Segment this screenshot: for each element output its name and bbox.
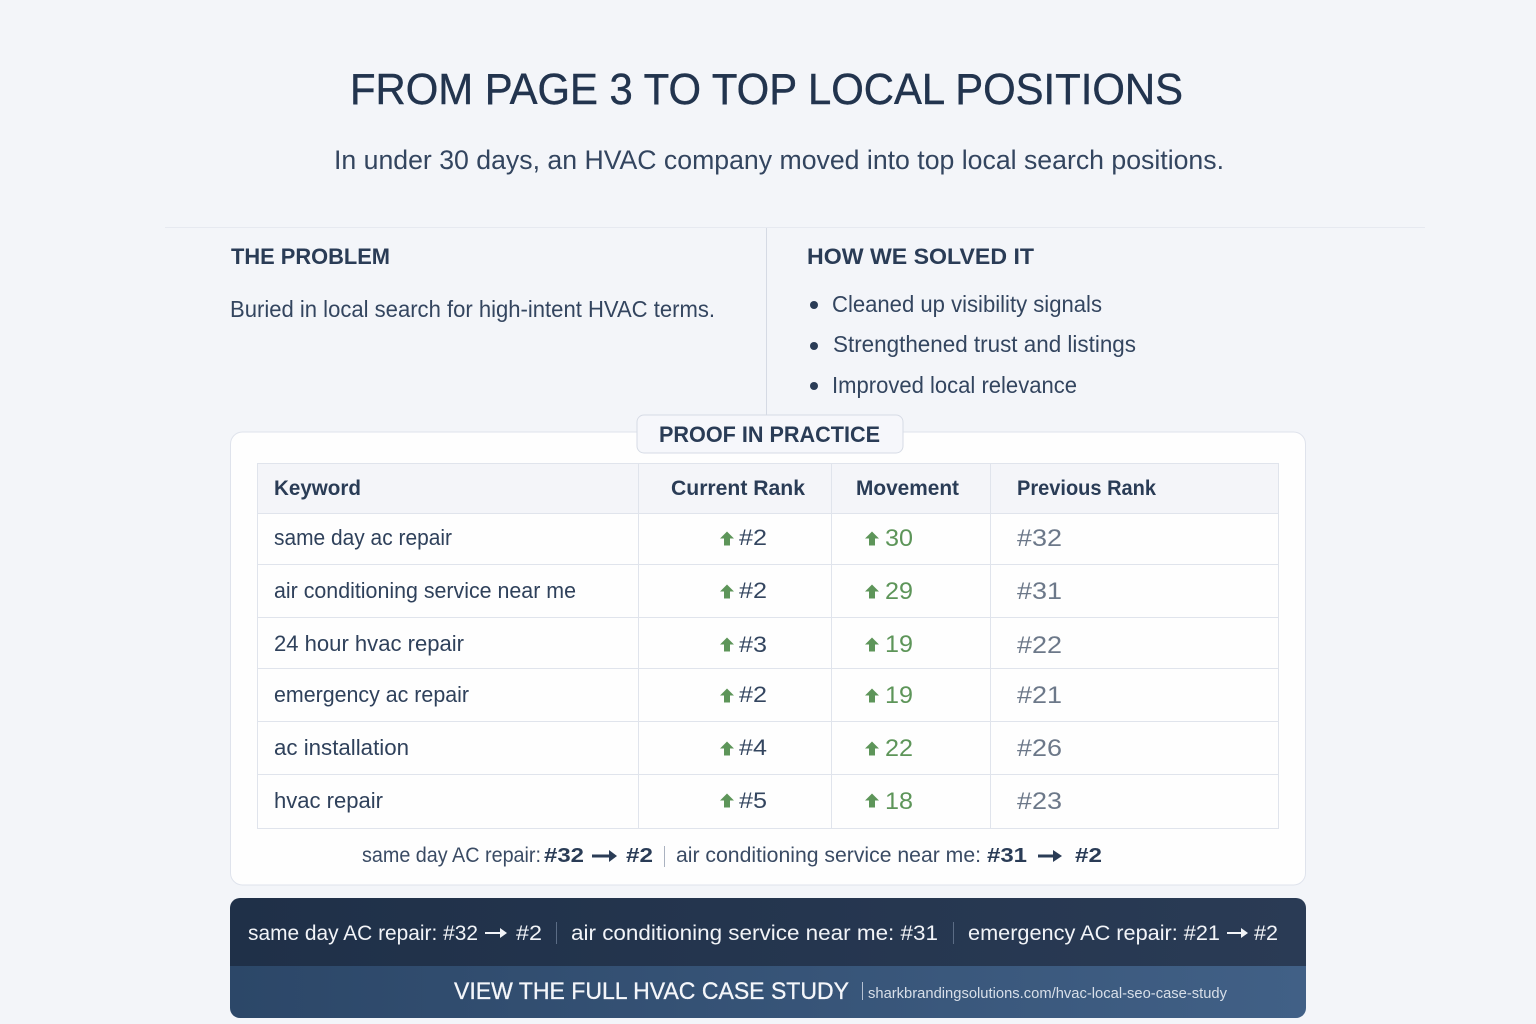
summary line: same day AC repair: xyxy=(362,843,541,867)
heading: the problem: THE PROBLEM xyxy=(231,244,390,269)
row: ac installation: 22 xyxy=(885,735,913,762)
results table xyxy=(257,463,1279,828)
row: hvac repair: 18 xyxy=(885,788,913,815)
row: same day ac repair: #32 xyxy=(1017,525,1062,552)
row: air conditioning service near me: air conditioning service near me xyxy=(274,578,576,603)
results strip xyxy=(230,898,1306,966)
footer band xyxy=(230,898,1306,1018)
panel: the problem xyxy=(230,244,715,322)
call to action: sharkbrandingsolutions.com/hvac-local-seo-case-study xyxy=(868,985,1227,1002)
row: emergency ac repair: emergency ac repair xyxy=(274,682,469,707)
row: hvac repair: #23 xyxy=(1017,788,1062,815)
badge: proof in practice: PROOF IN PRACTICE xyxy=(659,422,880,447)
results strip: emergency AC repair: #21 xyxy=(968,921,1220,945)
call to action: VIEW THE FULL HVAC CASE STUDY xyxy=(454,978,849,1005)
table header: Previous Rank xyxy=(1017,476,1156,500)
summary line: #2 xyxy=(1075,845,1102,867)
row: emergency ac repair xyxy=(274,682,1062,709)
solution list xyxy=(810,291,1136,398)
problem description: Buried in local search for high-intent HVAC terms. xyxy=(230,296,715,322)
results strip: #2 xyxy=(516,921,542,945)
call to action xyxy=(230,966,1306,1018)
row: ac installation: #4 xyxy=(739,735,767,760)
solution list: Strengthened trust and listings xyxy=(833,331,1136,357)
summary line: air conditioning service near me: xyxy=(676,843,981,867)
solution list: Cleaned up visibility signals xyxy=(832,291,1102,317)
results strip: same day AC repair: #32 xyxy=(248,921,478,945)
row: same day ac repair: #2 xyxy=(739,525,767,550)
row: 24 hour hvac repair: #3 xyxy=(739,632,767,657)
row: hvac repair xyxy=(274,788,1062,815)
table header: Keyword xyxy=(274,476,361,500)
row: same day ac repair xyxy=(274,525,1062,552)
row: 24 hour hvac repair: 19 xyxy=(885,631,913,658)
row: 24 hour hvac repair: #22 xyxy=(1017,632,1062,659)
row: emergency ac repair: #2 xyxy=(739,682,767,707)
panel: proof in practice xyxy=(230,415,1306,885)
heading: how we solved it: HOW WE SOLVED IT xyxy=(807,244,1035,269)
row: ac installation xyxy=(274,735,1062,762)
row: 24 hour hvac repair xyxy=(274,631,1062,659)
row: emergency ac repair: #21 xyxy=(1017,682,1062,709)
row: air conditioning service near me xyxy=(274,578,1062,605)
title: FROM PAGE 3 TO TOP LOCAL POSITIONS xyxy=(350,65,1183,114)
results strip: #2 xyxy=(1254,921,1278,945)
row: ac installation: #26 xyxy=(1017,735,1062,762)
row: same day ac repair: 30 xyxy=(885,525,913,552)
row: 24 hour hvac repair: 24 hour hvac repair xyxy=(274,631,464,656)
subtitle: In under 30 days, an HVAC company moved into top local search positions. xyxy=(334,145,1224,175)
table header: Movement xyxy=(856,476,959,500)
results strip: air conditioning service near me: #31 xyxy=(571,921,938,945)
badge: proof in practice xyxy=(637,415,903,453)
summary line: #32 xyxy=(544,845,584,867)
panel: how we solved it xyxy=(807,244,1136,398)
row: air conditioning service near me: 29 xyxy=(885,578,913,605)
row: air conditioning service near me: #2 xyxy=(739,578,767,603)
row: same day ac repair: same day ac repair xyxy=(274,525,452,550)
solution list: Improved local relevance xyxy=(832,372,1077,398)
row: hvac repair: hvac repair xyxy=(274,788,383,813)
summary line xyxy=(362,843,1102,867)
row: air conditioning service near me: #31 xyxy=(1017,578,1062,605)
summary line: #2 xyxy=(626,845,653,867)
table header: Current Rank xyxy=(671,476,805,500)
row: ac installation: ac installation xyxy=(274,735,409,760)
table header xyxy=(274,476,1156,500)
summary line: #31 xyxy=(987,845,1027,867)
row: emergency ac repair: 19 xyxy=(885,682,913,709)
row: hvac repair: #5 xyxy=(739,788,767,813)
